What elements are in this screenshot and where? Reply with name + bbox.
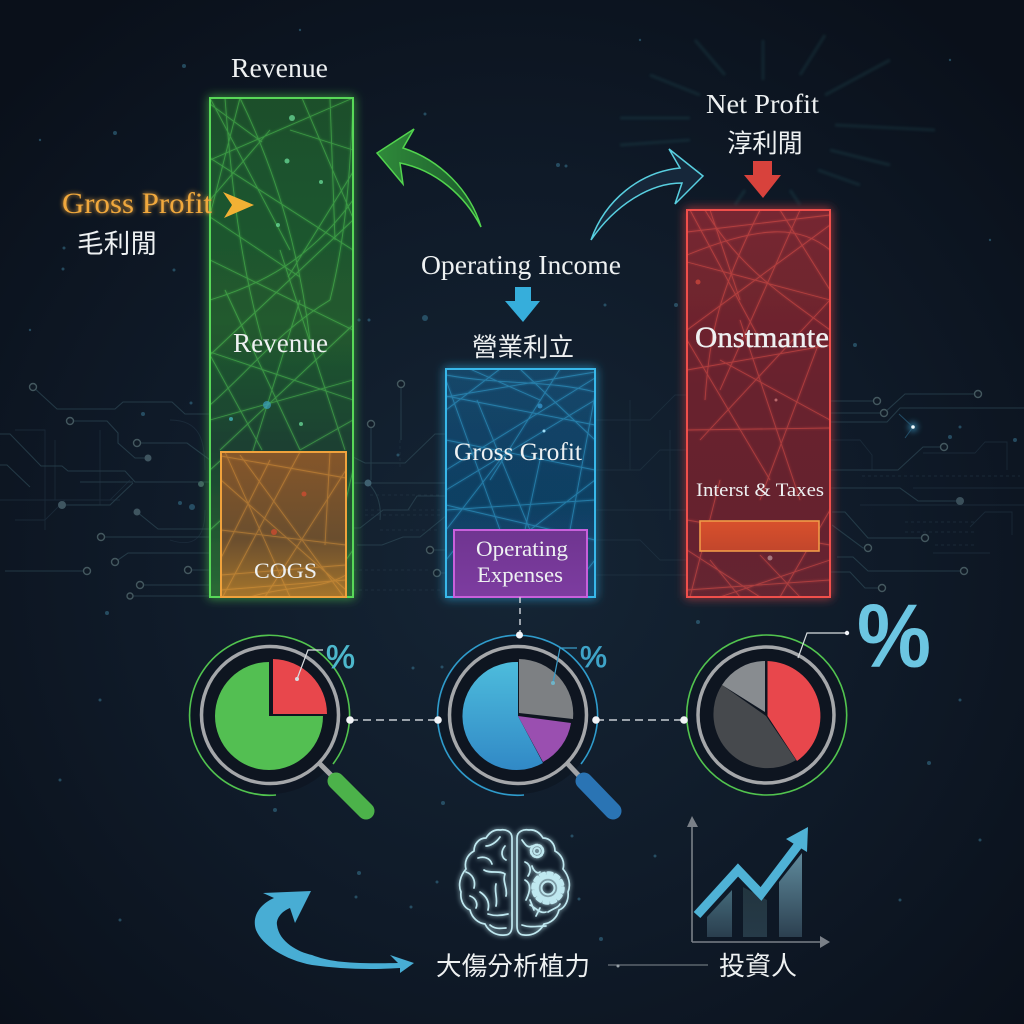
interest and taxes bar xyxy=(700,521,819,551)
callout leader and percent: % xyxy=(580,641,607,674)
label: onstmante: Onstmante xyxy=(695,321,829,354)
connector line xyxy=(608,964,708,968)
connectors between pies xyxy=(346,597,688,724)
bright star xyxy=(899,414,918,438)
label: big data analysis: 大傷分析植力 xyxy=(436,953,590,981)
circuit board pattern xyxy=(0,380,1024,599)
panel: operating bar xyxy=(446,369,595,597)
panel: COGS bar xyxy=(220,452,346,600)
panel: net profit bar xyxy=(687,210,830,597)
icon: magnifier pie operating margin xyxy=(438,635,613,811)
icon: orange arrowhead xyxy=(223,192,254,218)
callout leader and percent: % xyxy=(326,639,355,675)
icon: blue down arrow xyxy=(505,287,540,322)
green bar dots xyxy=(229,115,323,426)
label: gross grofit: Gross Grofit xyxy=(454,439,582,466)
trend arrow xyxy=(697,844,799,915)
icon: brain with gears xyxy=(460,830,569,935)
green mesh lines xyxy=(210,98,353,560)
panel: revenue bar xyxy=(210,98,353,597)
starburst behind net profit xyxy=(620,35,935,205)
callout leader xyxy=(798,631,849,658)
icon: curved blue arrow xyxy=(255,891,414,973)
icon: red down arrow xyxy=(744,161,781,198)
blue mesh lines xyxy=(446,369,595,570)
red mesh lines xyxy=(687,210,830,597)
heading: operating income: Operating Income xyxy=(421,250,621,280)
heading: revenue: Revenue xyxy=(231,53,328,83)
label: revenue inside bar: Revenue xyxy=(233,328,328,358)
arrow: green curved to revenue xyxy=(377,129,481,227)
label: investor: 投資人 xyxy=(719,951,797,981)
callout leader and percent xyxy=(551,641,607,685)
heading: operating income xyxy=(421,250,621,362)
arrow: teal curved to net profit xyxy=(591,149,703,240)
large percent sign: % xyxy=(857,587,931,687)
callout: gross profit: Gross Profit xyxy=(62,187,213,220)
panel: operating expenses bar xyxy=(454,530,587,597)
heading: net profit xyxy=(706,89,820,198)
operating income chinese label: 營業利立 xyxy=(472,334,574,362)
label: interest and taxes: Interst & Taxes xyxy=(696,480,824,501)
axes xyxy=(692,825,821,942)
gross profit chinese label: 毛利閒 xyxy=(77,229,157,259)
icon: pie net margin xyxy=(687,587,931,795)
label: COGS: COGS xyxy=(254,558,317,583)
heading: net profit: Net Profit xyxy=(706,89,820,119)
callout leader and percent xyxy=(295,639,355,681)
orange mesh lines xyxy=(220,452,346,600)
net profit chinese label: 淳利閒 xyxy=(727,130,803,158)
label: operating expenses: Operating xyxy=(476,536,568,561)
chart: rising trend xyxy=(687,816,830,948)
label: operating expenses xyxy=(476,536,568,587)
bars xyxy=(707,853,802,937)
callout: gross profit xyxy=(62,187,254,259)
label: operating expenses: Expenses xyxy=(477,562,563,587)
icon: magnifier pie gross margin xyxy=(190,635,366,811)
